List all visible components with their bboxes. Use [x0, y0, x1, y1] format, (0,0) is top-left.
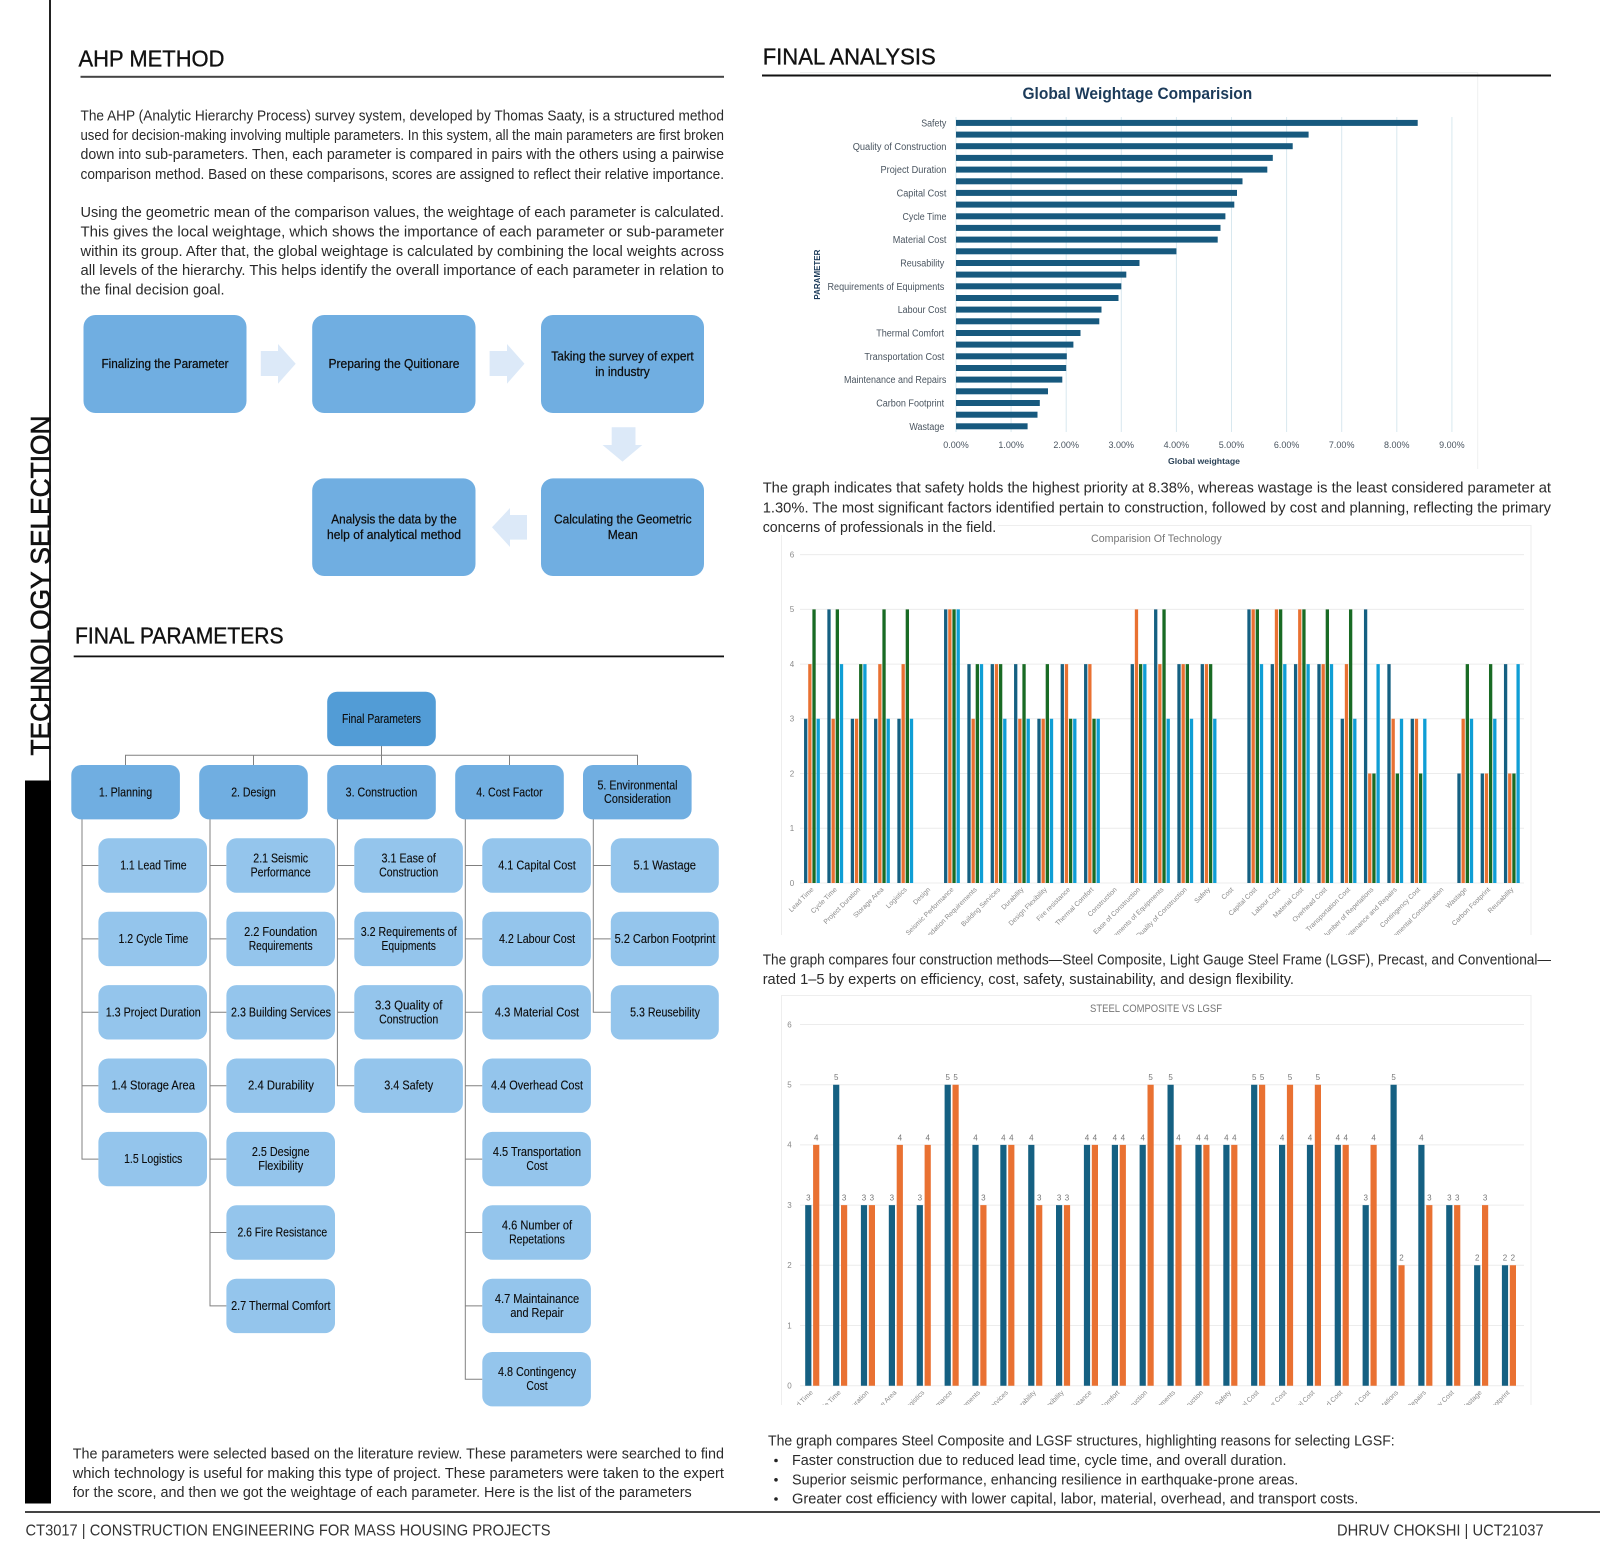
node 5.1 — [611, 838, 719, 893]
node 5.1: 5.1 Wastage — [634, 858, 696, 872]
y-axis labels: Maintenance and Repairs — [844, 375, 946, 386]
x-axis labels: 6.00% — [1274, 440, 1299, 450]
x-axis labels: 8.00% — [1384, 440, 1410, 450]
x-axis labels: 5.00% — [1219, 440, 1244, 450]
step: preparing the questionnaire: Preparing the Quitionare — [328, 356, 460, 371]
node 2.6 — [226, 1205, 335, 1260]
category labels: Requirements of Equipments — [1110, 1389, 1177, 1456]
category labels: Seismic Performance — [905, 886, 956, 937]
category labels: Thermal Comfort — [1054, 886, 1095, 927]
category labels: Contingency Cost — [1413, 1389, 1456, 1432]
category labels: Fire resistance — [1057, 1389, 1094, 1426]
text block: reasons for selecting LGSF — [768, 1432, 1395, 1508]
node 3.2 — [354, 912, 463, 966]
y-axis numbers: 6 — [790, 550, 795, 559]
category labels: Project Duration — [831, 1389, 871, 1429]
node 4.7 — [482, 1279, 591, 1333]
node 4.7: 4.7 Maintainance — [495, 1292, 579, 1306]
node 1.5 — [98, 1132, 207, 1186]
x-axis labels: 0.00% — [943, 440, 969, 450]
x-axis labels: 3.00% — [1109, 440, 1134, 450]
data labels: 4 — [1029, 1133, 1034, 1142]
data labels: 2 — [1399, 1254, 1404, 1263]
data labels: 4 — [1093, 1133, 1098, 1142]
series: LGSF — [810, 609, 1510, 883]
sidebar: technology selection — [25, 0, 56, 1504]
heading: final analysis: FINAL ANALYSIS — [763, 44, 936, 70]
category labels: Durability — [1000, 886, 1026, 911]
data labels: 5 — [1168, 1073, 1173, 1082]
y-axis labels: Carbon Footprint — [876, 398, 944, 410]
data labels — [806, 1073, 1516, 1263]
step: taking the survey: in industry — [595, 364, 650, 379]
node 2.7: 2.7 Thermal Comfort — [231, 1299, 331, 1313]
node: planning: 1. Planning — [99, 785, 152, 799]
node 1.1 — [98, 838, 207, 893]
data labels: 4 — [1224, 1133, 1229, 1142]
category labels: Project Duration — [823, 886, 862, 926]
series: steel composite — [806, 609, 1506, 883]
data labels: 4 — [1113, 1133, 1118, 1142]
category labels: Thermal Comfort — [1080, 1389, 1121, 1430]
node 3.1: 3.1 Ease of — [382, 852, 436, 866]
column chart: comparison of technology — [782, 526, 1531, 953]
node 2.6: 2.6 Fire Resistance — [237, 1226, 327, 1240]
node 2.2: 2.2 Foundation — [244, 925, 317, 939]
data labels: 4 — [898, 1133, 903, 1142]
text block: global weightage summary: The graph indicates that safety holds the highest priority at 8.38%, whereas wastage is the least considered parameter at — [763, 480, 1552, 497]
text block: technology comparison summary: rated 1–5 by experts on efficiency, cost, safety, sustainability, and design flexibility. — [763, 971, 1294, 988]
node 2.2 — [226, 912, 335, 966]
node 1.5: 1.5 Logistics — [124, 1152, 182, 1166]
step: taking the survey: Taking the survey of expert — [551, 348, 694, 364]
heading: AHP method: AHP METHOD — [78, 46, 224, 72]
data labels: 4 — [973, 1133, 978, 1142]
category labels: Design Flexibility — [1008, 886, 1049, 927]
node 5.2: 5.2 Carbon Footprint — [615, 932, 716, 946]
node: cost factor: 4. Cost Factor — [476, 785, 543, 799]
y-axis title: PARAMETER — [813, 249, 822, 300]
category labels: Transportation Cost — [1305, 886, 1352, 933]
arrow: step 4 to 5 — [492, 508, 527, 547]
step: finalizing the parameter — [84, 315, 246, 413]
y-axis numbers: 6 — [787, 1020, 792, 1029]
category labels: Material Cost — [1283, 1389, 1316, 1423]
data labels: 5 — [834, 1073, 839, 1082]
node 5.3: 5.3 Reusebility — [630, 1005, 701, 1019]
node: final parameters: Final Parameters — [342, 712, 421, 726]
footer: course title: CT3017 | CONSTRUCTION ENGINEERING FOR MASS HOUSING PROJECTS — [26, 1522, 550, 1540]
node 2.1: Performance — [251, 866, 311, 880]
node: design: 2. Design — [231, 785, 276, 799]
footer — [25, 1511, 1600, 1540]
node: design — [199, 765, 308, 819]
y-axis labels: Thermal Comfort — [876, 328, 944, 340]
node 4.3 — [482, 985, 591, 1040]
data labels: 4 — [1308, 1133, 1313, 1142]
data labels: 5 — [1148, 1073, 1153, 1082]
node 4.6: Repetations — [509, 1232, 565, 1246]
node: environmental consideration: Consideration — [604, 792, 671, 806]
node 3.4: 3.4 Safety — [384, 1079, 434, 1093]
category labels: Design — [912, 886, 932, 906]
node 1.2 — [98, 912, 207, 966]
x-axis labels: 9.00% — [1439, 440, 1465, 450]
data labels: 4 — [1001, 1133, 1006, 1142]
y-axis numbers — [790, 550, 795, 888]
node 4.2 — [482, 912, 591, 966]
category labels: Logistics — [885, 886, 909, 910]
y-axis labels: Requirements of Equipments — [828, 282, 944, 293]
node 4.3: 4.3 Material Cost — [495, 1005, 580, 1019]
chart title: Global Weightage Comparision — [1022, 84, 1252, 103]
arrow: step 1 to 2 — [261, 344, 296, 384]
y-axis numbers: 3 — [790, 715, 795, 724]
data labels: 2 — [1511, 1254, 1516, 1263]
text block: reasons for selecting LGSF: The graph compares Steel Composite and LGSF structures, highlighting reasons for selecting LGSF: — [768, 1432, 1395, 1449]
data labels: 5 — [953, 1073, 958, 1082]
data labels: 3 — [1455, 1194, 1460, 1202]
data labels: 3 — [862, 1194, 867, 1202]
text block: AHP description: comparison method. Based on these comparisons, scores are assigned to reflect their relative importance. — [80, 166, 724, 183]
category labels: Safety — [1193, 886, 1212, 905]
node 4.7: and Repair — [510, 1306, 564, 1320]
data labels: 4 — [814, 1133, 819, 1142]
node 1.4 — [98, 1058, 207, 1113]
footer: author: DHRUV CHOKSHI | UCT21037 — [1337, 1522, 1544, 1540]
node 4.5: Cost — [526, 1159, 548, 1173]
step: analysis of the data — [312, 478, 476, 576]
node 4.8 — [482, 1352, 591, 1406]
node 1.1: 1.1 Lead Time — [120, 858, 187, 872]
data labels: 3 — [806, 1194, 811, 1202]
node 1.4: 1.4 Storage Area — [112, 1079, 195, 1093]
category labels: Capital Cost — [1229, 1389, 1261, 1421]
node: planning — [71, 765, 180, 819]
node: environmental consideration — [583, 765, 692, 819]
sidebar title: TECHNOLOGY SELECTION — [25, 416, 56, 756]
category labels: Seismic Performance — [903, 1389, 954, 1440]
category labels: Building Services — [968, 1389, 1010, 1431]
y-axis numbers: 5 — [790, 605, 795, 614]
y-axis numbers: 0 — [790, 879, 795, 888]
category labels: Quality of Construction — [1151, 1389, 1205, 1443]
node 1.3 — [98, 985, 207, 1040]
node: construction: 3. Construction — [346, 785, 417, 799]
y-axis numbers: 4 — [787, 1141, 792, 1150]
category labels: Logistics — [903, 1389, 927, 1413]
data labels: 3 — [1363, 1194, 1368, 1202]
y-axis labels: Labour Cost — [898, 305, 947, 316]
y-axis numbers: 1 — [787, 1321, 792, 1330]
text block: AHP description: The AHP (Analytic Hierarchy Process) survey system, developed by Thomas Saaty, is a structured method — [80, 108, 724, 124]
node 1.3: 1.3 Project Duration — [106, 1005, 201, 1019]
text block: AHP description: the final decision goal. — [80, 282, 224, 299]
node: environmental consideration: 5. Environmental — [598, 778, 678, 792]
step: finalizing the parameter: Finalizing the Parameter — [102, 356, 229, 371]
category labels: Material Cost — [1272, 886, 1305, 920]
text block: technology comparison summary — [763, 952, 1551, 988]
text block: AHP description: Using the geometric mean of the comparison values, the weightage of each parameter is calculated. — [80, 204, 724, 221]
category labels: Contingency Cost — [1379, 886, 1422, 929]
category labels: Storage Area — [865, 1389, 898, 1422]
category labels: Cost — [1220, 886, 1235, 901]
data labels: 4 — [1280, 1133, 1285, 1142]
node 4.8: 4.8 Contingency — [498, 1365, 577, 1379]
text block: parameter selection note — [72, 1446, 725, 1501]
node 2.5 — [226, 1132, 335, 1186]
node 4.6: 4.6 Number of — [502, 1218, 573, 1232]
category labels: Foundation Requirements — [922, 1389, 982, 1450]
x-axis title: Global weightage — [1168, 456, 1240, 466]
category labels: Labour Cost — [1251, 886, 1282, 918]
step: taking the survey — [541, 315, 704, 413]
node 4.8: Cost — [526, 1379, 548, 1393]
node 4.1: 4.1 Capital Cost — [498, 858, 576, 872]
category labels: Reusability — [1487, 886, 1516, 915]
node 3.1: Construction — [379, 866, 438, 880]
flow diagram: AHP process — [84, 315, 704, 576]
chart title: Comparision Of Technology — [1091, 533, 1222, 545]
chart title: STEEL COMPOSITE VS LGSF — [1090, 1003, 1222, 1015]
x-axis labels — [943, 440, 1465, 450]
text block: AHP description: all levels of the hierarchy. This helps identify the overall importance of each parameter in relation to — [80, 262, 724, 279]
y-axis numbers: 4 — [790, 660, 795, 669]
y-axis numbers — [787, 1020, 792, 1390]
category labels: Carbon Footprint — [1451, 886, 1492, 927]
series: LGSF — [816, 1085, 1513, 1386]
step: calculating the geometric mean — [541, 478, 704, 576]
y-axis numbers: 2 — [787, 1261, 792, 1270]
category labels: Wastage — [1460, 1389, 1484, 1413]
category labels: Capital Cost — [1228, 886, 1259, 918]
node: cost factor — [455, 765, 564, 819]
step: analysis of the data: Analysis the data by the — [331, 512, 457, 526]
node 2.5: 2.5 Designe — [252, 1145, 310, 1159]
step: analysis of the data: help of analytical method — [327, 527, 461, 542]
node 2.1: 2.1 Seismic — [253, 852, 308, 866]
text block: global weightage summary — [763, 480, 1552, 536]
y-axis labels: Project Duration — [880, 165, 946, 176]
data labels: 4 — [1121, 1133, 1126, 1142]
node 2.3 — [226, 985, 335, 1040]
category labels: Transportation Cost — [1325, 1389, 1372, 1436]
category labels: Environmental Consideration — [1379, 886, 1445, 953]
category labels: Wastage — [1445, 886, 1469, 910]
text block: reasons for selecting LGSF: Faster construction due to reduced lead time, cycle time, and overall duration. — [792, 1452, 1286, 1469]
category labels: Carbon Footprint — [1470, 1389, 1511, 1430]
y-axis labels: Safety — [921, 118, 946, 129]
node 5.2 — [611, 912, 719, 966]
data labels: 3 — [1037, 1194, 1042, 1202]
node 2.1 — [226, 838, 335, 893]
category labels: Requirements of Equipments — [1098, 886, 1166, 953]
y-axis labels: Transportation Cost — [864, 352, 944, 363]
data labels: 5 — [1260, 1073, 1265, 1082]
category labels: Foundation Requirements — [918, 886, 979, 947]
data labels: 3 — [1447, 1194, 1452, 1202]
data labels: 4 — [1371, 1133, 1376, 1142]
data labels: 3 — [870, 1194, 875, 1202]
node 3.3 — [354, 985, 463, 1040]
text block: AHP description — [80, 108, 724, 299]
category labels: Lead Time — [788, 886, 816, 914]
node 4.2: 4.2 Labour Cost — [499, 932, 575, 946]
node 4.6 — [482, 1205, 591, 1260]
text block: global weightage summary: 1.30%. The most significant factors identified pertain to construction, followed by cost and planning, reflecting the primary — [763, 499, 1551, 516]
org chart: parameter hierarchy — [71, 692, 719, 1406]
category labels: Cycle Time — [810, 886, 839, 915]
data labels: 5 — [1252, 1073, 1257, 1082]
category labels: Maintenance and Repairs — [1368, 1389, 1428, 1449]
text block: AHP description: down into sub-parameters. Then, each parameter is compared in pairs with the others using a pairwise — [80, 146, 724, 163]
text block: parameter selection note: which technology is useful for making this type of project. These parameters were taken to the expert — [72, 1465, 725, 1482]
data labels: 3 — [1427, 1194, 1432, 1202]
data labels: 4 — [1336, 1133, 1341, 1142]
category labels: Safety — [1214, 1389, 1233, 1408]
data labels: 4 — [925, 1133, 930, 1142]
y-axis numbers: 5 — [787, 1080, 792, 1090]
y-axis labels: Reusability — [900, 258, 944, 270]
category labels: Design Flexibility — [1025, 1389, 1066, 1430]
node 5.3 — [611, 985, 719, 1040]
category labels: Overhead Cost — [1291, 886, 1329, 924]
y-axis labels: Quality of Construction — [853, 142, 946, 153]
category labels: Number of Repetations — [1346, 1389, 1400, 1444]
text block: AHP description: This gives the local weightage, which shows the importance of each parameter or sub-parameter — [80, 223, 724, 240]
y-axis labels: Wastage — [909, 422, 945, 433]
x-axis labels: 7.00% — [1329, 440, 1354, 450]
node 3.2: 3.2 Requirements of — [361, 925, 457, 939]
text block: AHP description: used for decision-making involving multiple parameters. In this system, all the main parameters are first broken — [80, 127, 724, 144]
series: precast — [814, 609, 1514, 883]
data labels: 3 — [1057, 1194, 1062, 1202]
text block: parameter selection note: for the score, and then we got the weightage of each parameter. Here is the list of the parameters — [73, 1484, 692, 1501]
y-axis numbers: 3 — [787, 1201, 792, 1210]
category labels: Cycle Time — [814, 1389, 843, 1418]
text block: parameter selection note: The parameters were selected based on the literature review. These parameters were searched to find — [73, 1446, 724, 1462]
x-axis labels: 4.00% — [1164, 440, 1189, 450]
step: preparing the questionnaire — [312, 315, 476, 413]
series: conventional — [818, 609, 1518, 883]
data labels: 2 — [1475, 1254, 1480, 1263]
node 2.4 — [226, 1058, 335, 1113]
node 3.3: 3.3 Quality of — [375, 998, 443, 1012]
y-axis numbers: 2 — [790, 769, 795, 778]
category labels: Building Services — [960, 886, 1002, 928]
x-axis labels: 2.00% — [1053, 440, 1079, 450]
data labels: 4 — [1343, 1133, 1348, 1142]
data labels: 4 — [1085, 1133, 1090, 1142]
y-axis numbers: 1 — [790, 824, 795, 833]
data labels: 4 — [1140, 1133, 1145, 1142]
y-axis labels: Capital Cost — [897, 188, 947, 199]
y-axis labels: Cycle Time — [902, 212, 947, 223]
category labels: Quality of Construction — [1135, 886, 1189, 940]
node 4.5 — [482, 1132, 591, 1186]
category labels: Overhead Cost — [1307, 1389, 1344, 1427]
data labels: 4 — [1176, 1133, 1181, 1142]
data labels: 3 — [842, 1194, 847, 1202]
node 4.4 — [482, 1058, 591, 1113]
node 2.5: Flexibility — [258, 1159, 304, 1173]
node 4.4: 4.4 Overhead Cost — [491, 1079, 584, 1093]
data labels: 4 — [1009, 1133, 1014, 1142]
data labels: 5 — [945, 1073, 950, 1082]
bar chart: global weightage comparison — [800, 72, 1478, 469]
data labels: 4 — [1204, 1133, 1209, 1142]
node 2.2: Requirements — [249, 939, 313, 953]
category labels: Ease of Construction — [1092, 886, 1142, 936]
y-axis labels — [828, 118, 947, 433]
category labels: Maintenance and Repairs — [1339, 886, 1399, 946]
bars — [956, 120, 1418, 429]
y-axis numbers: 0 — [787, 1382, 792, 1390]
category labels — [788, 888, 1514, 935]
step: calculating the geometric mean: Calculating the Geometric — [554, 512, 692, 526]
node 3.2: Equipments — [382, 939, 436, 953]
node 2.4: 2.4 Durability — [248, 1079, 315, 1093]
node 3.1 — [354, 838, 463, 893]
node: construction — [327, 765, 436, 819]
data labels: 3 — [981, 1194, 986, 1202]
data labels: 4 — [1419, 1133, 1424, 1142]
data labels: 5 — [1391, 1073, 1396, 1082]
node 4.5: 4.5 Transportation — [493, 1145, 581, 1159]
arrow: step 3 to 4 — [602, 427, 642, 462]
data labels: 3 — [890, 1194, 895, 1202]
text block: reasons for selecting LGSF: Superior seismic performance, enhancing resilience in earthquake-prone areas. — [792, 1471, 1298, 1488]
data labels: 4 — [1232, 1133, 1237, 1142]
category labels: Ease of Construction — [1100, 1389, 1149, 1439]
data labels: 4 — [1196, 1133, 1201, 1142]
text block: global weightage summary: concerns of professionals in the field. — [763, 519, 996, 536]
connector lines — [82, 746, 638, 1379]
x-axis labels: 1.00% — [998, 440, 1024, 450]
data labels: 5 — [1288, 1073, 1293, 1082]
data labels: 3 — [918, 1194, 923, 1202]
series: steel composite — [808, 1085, 1505, 1386]
category labels: Durability — [1013, 1389, 1038, 1414]
category labels: Fire resistance — [1036, 886, 1072, 923]
text block: AHP description: within its group. After that, the global weightage is calculated by combining the local weights across — [80, 243, 724, 260]
y-axis labels: Material Cost — [893, 235, 947, 246]
node 1.2: 1.2 Cycle Time — [118, 932, 188, 946]
text block: reasons for selecting LGSF: Greater cost efficiency with lower capital, labor, material, overhead, and transport costs. — [792, 1490, 1358, 1508]
data labels: 2 — [1503, 1254, 1508, 1263]
category labels: Construction — [1087, 886, 1119, 918]
heading: final parameters: FINAL PARAMETERS — [75, 622, 284, 648]
data labels: 3 — [1065, 1194, 1070, 1202]
arrow: step 2 to 3 — [490, 344, 524, 384]
category labels: Storage Area — [852, 886, 886, 919]
node: final parameters — [327, 692, 436, 746]
node 3.4 — [354, 1058, 463, 1113]
step: calculating the geometric mean: Mean — [608, 527, 638, 542]
data labels: 3 — [1483, 1194, 1488, 1202]
node 4.1 — [482, 838, 591, 893]
node 2.3: 2.3 Building Services — [231, 1005, 331, 1019]
category labels: Lead Time — [787, 1389, 815, 1417]
node 3.3: Construction — [379, 1012, 438, 1026]
node 2.7 — [226, 1279, 335, 1333]
column chart: steel composite vs LGSF — [781, 995, 1532, 1405]
category labels: Labour Cost — [1257, 1389, 1289, 1421]
category labels: Number of Repetations — [1321, 886, 1376, 941]
data labels: 5 — [1316, 1073, 1321, 1082]
category labels — [797, 1390, 1510, 1405]
